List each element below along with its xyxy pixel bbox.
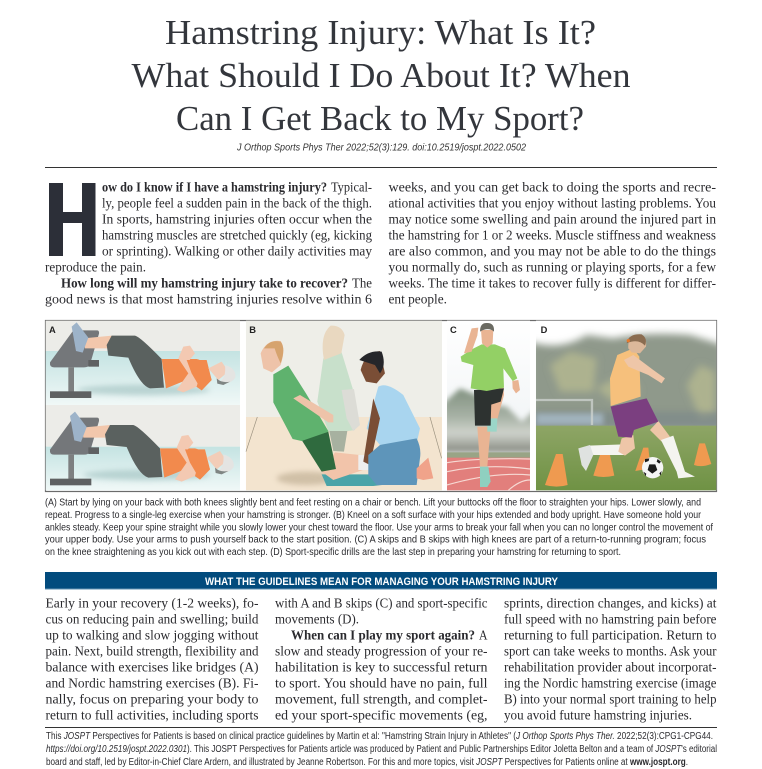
title [132, 13, 630, 138]
label A: A [49, 325, 56, 335]
text block: guidelines column 2: habilitation is key to successful return [275, 660, 488, 675]
text block: intro left column: Typical- [331, 180, 372, 195]
text block: guidelines column 2: When can I play my sport again? [291, 628, 475, 643]
banner heading: WHAT THE GUIDELINES MEAN FOR MANAGING YOUR HAMSTRING INJURY [205, 576, 559, 588]
text block: intro left column: How long will my hamstring injury take to recover? [61, 276, 348, 291]
label B: B [249, 325, 256, 335]
text block: guidelines column 2: movements (D). [275, 612, 359, 628]
text block: intro left column: or sprinting). Walking or other daily activities may [102, 244, 372, 260]
footer note: ). This JOSPT Perspectives for Patients article was produced by Patient and Public Partnerships Editor Joletta Belton and a team of JOSPT's editorial [187, 744, 717, 755]
drop cap H [49, 183, 96, 256]
caption: your upper body. Use your arms to push yourself back to the start position. (C) A skips and B skips with high knees are part of a return-to-running program; focus [45, 535, 706, 546]
text block: intro right column: ational activities that you enjoy without lasting problems. You [388, 196, 716, 211]
text block: guidelines column 1: return to full activities, including sports [46, 708, 258, 723]
text block: guidelines column 1: balance with exercises like bridges (A) [46, 660, 258, 676]
label C: C [450, 325, 457, 335]
title: Hamstring Injury: What Is It? [165, 13, 596, 52]
citation: J Orthop Sports Phys Ther 2022;52(3):129. doi:10.2519/jospt.2022.0502 [236, 142, 526, 154]
text block: guidelines column 2: ed your sport-specific movements (eg, [275, 708, 488, 724]
text block: guidelines column 1 [46, 596, 259, 723]
text block: guidelines column 3: sport can take weeks to months. Ask your [504, 644, 717, 659]
text block: intro left column: reproduce the pain. [45, 260, 146, 275]
text block: guidelines column 3: you avoid future hamstring injuries. [504, 708, 692, 723]
image D: soccer drills [530, 321, 723, 490]
text block: guidelines column 3: returning to full participation. Return to [504, 628, 717, 643]
text block: guidelines column 3: full speed with no hamstring pain before [504, 612, 716, 627]
title: Can I Get Back to My Sport? [176, 99, 584, 138]
text block: guidelines column 2: movement, full strength, and complet- [275, 692, 488, 707]
text block: guidelines column 1: Early in your recovery (1-2 weeks), fo- [46, 596, 259, 612]
text block: intro left column: The [352, 276, 372, 291]
text block: intro left column: hamstring muscles are stretched quickly (eg, kicking [102, 228, 372, 244]
text block: guidelines column 1: pain. Next, build strength, flexibility and [46, 644, 259, 659]
text block: guidelines column 2: with A and B skips (C) and sport-specific [275, 596, 488, 612]
footer note [46, 731, 717, 768]
text block: intro right column: you normally do, such as running or playing sports, for a few [388, 260, 716, 275]
text block: intro right column: weeks. The time it takes to recover fully is different for differ- [388, 276, 716, 291]
illustration panel [46, 320, 723, 492]
text block: intro right column: may notice some swelling and pain around the injured part in [388, 212, 716, 227]
text block: guidelines column 2: A [479, 628, 488, 643]
text block: guidelines column 1: and Nordic hamstring exercises (B). Fi- [46, 676, 259, 692]
text block: guidelines column 3: rehabilitation provider about incorporat- [504, 660, 717, 675]
text block: guidelines column 3: ing the Nordic hamstring exercise (image [504, 676, 716, 692]
label D: D [541, 325, 548, 335]
text block: intro right column [388, 180, 716, 307]
text block: intro left column: ow do I know if I have a hamstring injury? [102, 180, 327, 195]
footer note: This JOSPT Perspectives for Patients is based on clinical practice guidelines by Martin et al: "Hamstring Strain Injury in Athletes" (J Orthop Sports Phys Ther. 2022;52(3):CPG1-CPG44. [46, 731, 713, 742]
caption [45, 498, 713, 558]
text block: intro right column: the hamstring for 1 or 2 weeks. Muscle stiffness and weakness [388, 228, 716, 243]
text block: guidelines column 1: nally, focus on preparing your body to [46, 692, 259, 707]
text block: intro right column: are also common, and you may not be able to do the things [388, 244, 716, 259]
title: What Should I Do About It? When [132, 56, 630, 95]
image A: bridge exercise [46, 321, 240, 490]
footer note: https://doi.org/10.2519/jospt.2022.0301 [46, 744, 187, 755]
text block: intro left column [45, 180, 372, 307]
banner heading [45, 572, 717, 590]
text block: intro right column: ent people. [388, 292, 447, 307]
text block: intro left column: ly, people feel a sudden pain in the back of the thigh. [102, 196, 372, 211]
text block: guidelines column 3: B) into your normal sport training to help [504, 692, 717, 708]
text block: intro left column: In sports, hamstring injuries often occur when the [102, 212, 372, 227]
text block: guidelines column 1: up to walking and slow jogging without [46, 628, 259, 643]
text block: guidelines column 2 [275, 596, 488, 724]
text block: intro left column: good news is that most hamstring injuries resolve within 6 [45, 292, 372, 307]
image B: Nordic hamstring exercise [246, 321, 442, 490]
text block: guidelines column 2: slow and steady progression of your re- [275, 644, 488, 659]
text block: guidelines column 3: sprints, direction changes, and kicks) at [504, 596, 717, 612]
text block: intro right column: weeks, and you can get back to doing the sports and recre- [388, 180, 716, 195]
image C: high knees runner [447, 320, 530, 490]
footer note: board and staff, led by Editor-in-Chief Clare Ardern, and illustrated by Jeanne Robertson. For this and more topics, visit JOSPT Perspectives for Patients online at www.jospt.org. [46, 757, 688, 768]
text block: guidelines column 2: to sport. You should have no pain, full [275, 676, 488, 691]
caption: on the knee straightening as you kick out with each step. (D) Sport-specific drills are the last step in preparing your hamstring for returning to sport. [45, 547, 621, 558]
text block: guidelines column 3 [504, 596, 717, 723]
text block: guidelines column 1: cus on reducing pain and swelling; build [46, 612, 259, 627]
